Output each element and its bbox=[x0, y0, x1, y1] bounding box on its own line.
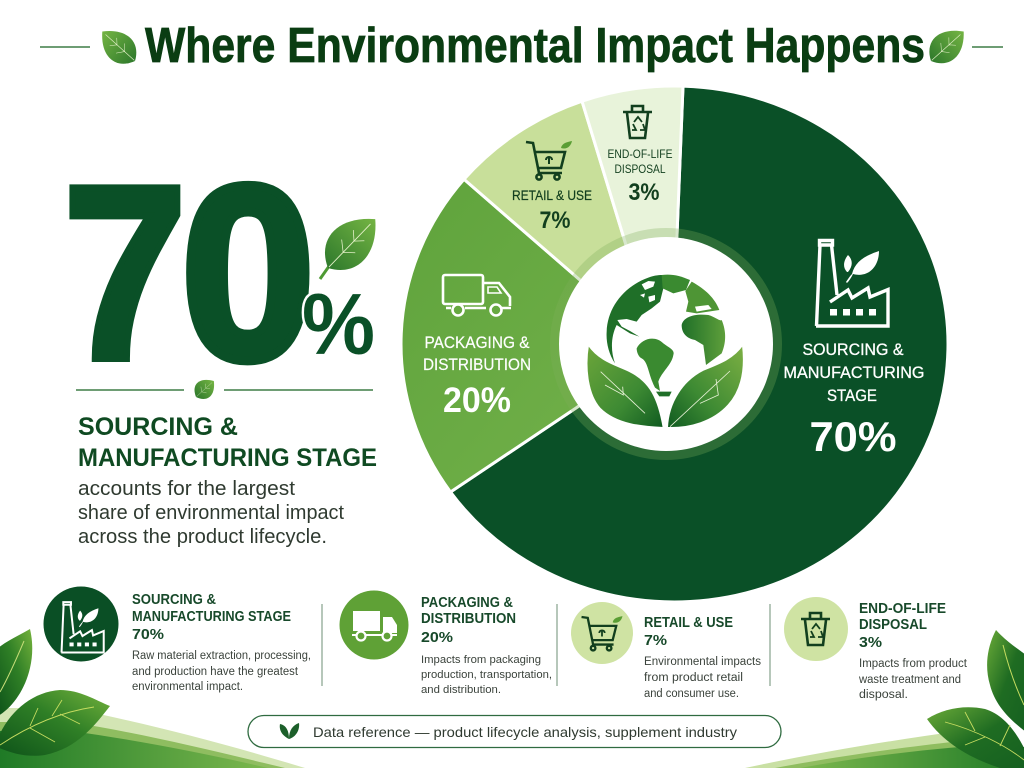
slice: disposal 3% bbox=[582, 86, 683, 344]
legend: packaging: and distribution. bbox=[421, 684, 501, 696]
icon: cart badge bbox=[571, 602, 633, 664]
legend: retail: 7% bbox=[644, 632, 667, 649]
data reference pill bbox=[248, 716, 781, 748]
label: sourcing slice: SOURCING & bbox=[802, 340, 904, 359]
leaf: globe left bbox=[587, 345, 663, 428]
legend: sourcing bbox=[44, 586, 311, 693]
legend: disposal: Impacts from product bbox=[859, 658, 968, 670]
legend: sourcing: and production have the greatest bbox=[132, 666, 299, 678]
icon: leaf by 70% bbox=[312, 204, 390, 282]
legend: sourcing: MANUFACTURING STAGE bbox=[132, 609, 291, 625]
left text block: accounts for the largest bbox=[78, 478, 295, 500]
legend: retail: Environmental impacts bbox=[644, 656, 761, 668]
label: sourcing slice: MANUFACTURING bbox=[784, 363, 924, 382]
icon: truck badge bbox=[340, 590, 408, 660]
legend dividers bbox=[322, 604, 770, 686]
legend: packaging: production, transportation, bbox=[421, 669, 552, 681]
left text block: MANUFACTURING STAGE bbox=[78, 444, 377, 472]
bottom swoosh right bbox=[745, 731, 1024, 768]
label: packaging slice: PACKAGING & bbox=[424, 334, 530, 352]
legend: disposal: disposal. bbox=[859, 689, 908, 701]
label: packaging slice: 20% bbox=[443, 381, 511, 420]
legend: sourcing: 70% bbox=[132, 626, 164, 643]
label: packaging slice bbox=[423, 275, 531, 420]
icon: factory badge bbox=[44, 586, 118, 662]
title: Where Environmental Impact Happens bbox=[145, 19, 925, 73]
label: disposal slice bbox=[608, 106, 673, 206]
legend: retail: from product retail bbox=[644, 672, 743, 684]
corner leaves left bbox=[0, 629, 110, 756]
corner leaves right bbox=[927, 630, 1024, 768]
legend: disposal bbox=[784, 597, 968, 701]
legend: retail bbox=[571, 602, 761, 700]
slice: retail 7% bbox=[464, 101, 666, 344]
label: sourcing slice: STAGE bbox=[827, 386, 877, 405]
label: sourcing slice: 70% bbox=[810, 413, 896, 460]
label: sourcing slice bbox=[784, 240, 924, 460]
legend: sourcing: SOURCING & bbox=[132, 592, 216, 608]
left text block: share of environmental impact bbox=[78, 502, 344, 524]
legend: sourcing: Raw material extraction, processing, bbox=[132, 650, 311, 662]
divider with leaf bbox=[76, 374, 373, 404]
left text block: across the product lifecycle. bbox=[78, 526, 327, 548]
icon: bin badge bbox=[784, 597, 848, 661]
big number 70% bbox=[63, 134, 375, 412]
icon: pill leaf bbox=[280, 723, 299, 739]
pie inner ring bbox=[550, 228, 782, 460]
legend: disposal: 3% bbox=[859, 634, 882, 651]
left text block: SOURCING & bbox=[78, 413, 238, 441]
pie centre circle bbox=[559, 237, 773, 451]
bottom swoosh left bbox=[0, 708, 305, 768]
label: disposal slice: END-OF-LIFE bbox=[608, 149, 673, 161]
legend: packaging: PACKAGING & bbox=[421, 595, 513, 611]
big number 70%: 0 bbox=[181, 134, 315, 412]
icon: cart bbox=[526, 141, 572, 180]
icon: globe with leaves bbox=[587, 275, 744, 428]
label: packaging slice: DISTRIBUTION bbox=[423, 356, 531, 374]
big number 70%: 7 bbox=[63, 134, 187, 412]
icon: bin bbox=[623, 106, 652, 138]
legend: disposal: END-OF-LIFE bbox=[859, 601, 946, 617]
legend: packaging bbox=[340, 590, 552, 696]
legend: packaging: Impacts from packaging bbox=[421, 654, 541, 666]
icon: title leaf right bbox=[921, 21, 973, 71]
label: retail slice: RETAIL & USE bbox=[512, 188, 592, 203]
left text block bbox=[78, 413, 377, 548]
legend: disposal: DISPOSAL bbox=[859, 617, 927, 633]
label: disposal slice: 3% bbox=[628, 179, 660, 206]
leaf: globe right bbox=[667, 345, 744, 428]
pie chart bbox=[401, 86, 948, 602]
slice: sourcing 70% bbox=[450, 86, 948, 602]
icon: truck outline bbox=[443, 275, 511, 316]
slice: packaging 20% bbox=[401, 179, 666, 492]
legend: retail: RETAIL & USE bbox=[644, 615, 733, 631]
label: retail slice: 7% bbox=[540, 207, 570, 234]
icon: factory bbox=[816, 240, 888, 326]
icon: title leaf left bbox=[92, 21, 144, 72]
label: disposal slice: DISPOSAL bbox=[614, 164, 666, 176]
legend: sourcing: environmental impact. bbox=[132, 681, 243, 693]
legend: retail: and consumer use. bbox=[644, 688, 739, 700]
data reference pill: Data reference — product lifecycle analysis, supplement industry bbox=[313, 724, 737, 740]
legend: packaging: 20% bbox=[421, 629, 453, 646]
legend: packaging: DISTRIBUTION bbox=[421, 611, 516, 627]
big number 70%: % bbox=[302, 277, 375, 373]
label: retail slice bbox=[512, 141, 592, 234]
legend: disposal: waste treatment and bbox=[858, 674, 961, 686]
